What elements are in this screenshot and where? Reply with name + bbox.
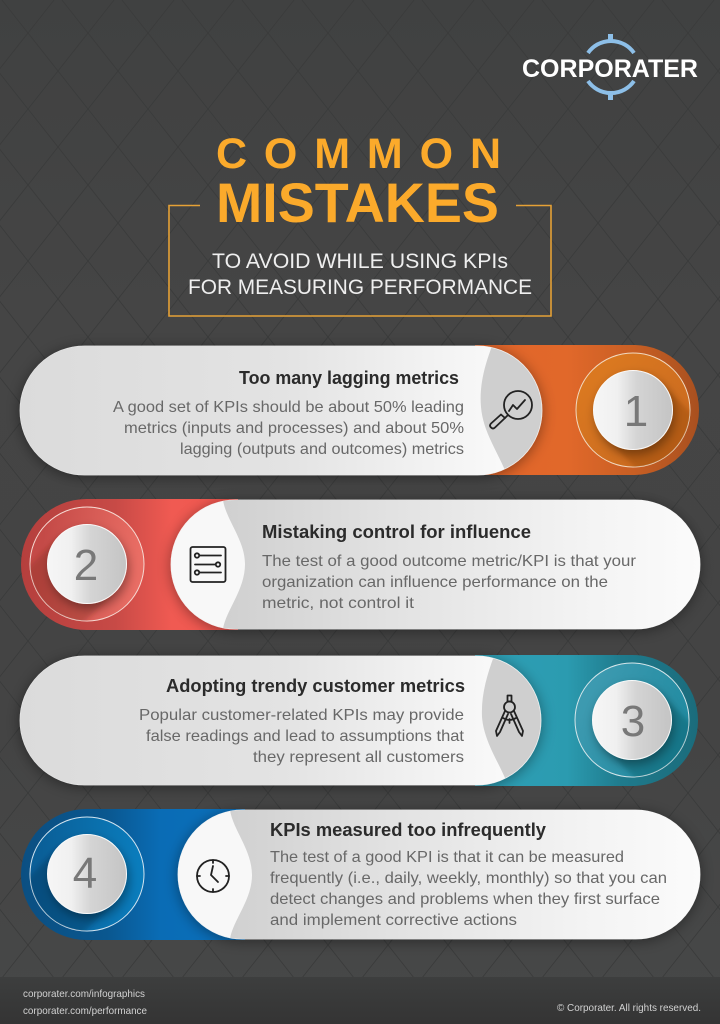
number badge 3: 3 [621,697,645,746]
heading: mistakes: MISTAKES [216,171,499,234]
white body [171,500,720,629]
logo: Corporater [522,34,698,100]
heading: common: COMMON [216,130,501,178]
icon: magnifier with trend line [490,391,532,428]
text 2: The test of a good outcome metric/KPI is that your [262,553,637,570]
white body [0,346,542,475]
white body [178,810,720,939]
coloured pill [475,655,698,786]
title frame [169,206,551,316]
footer [0,977,720,1024]
text 2: metric, not control it [262,595,415,612]
coloured pill [21,499,238,630]
panel: mistake 2 [21,498,704,635]
footer links [23,988,147,1017]
text 4: KPIs measured too infrequently [270,820,546,840]
number badge 4 [30,816,144,932]
text 2 [262,522,637,612]
number badge 2: 2 [74,541,98,590]
number badge 2 [30,506,144,622]
text 3: Popular customer-related KPIs may provide [139,707,464,724]
footer links: corporater.com/performance [23,1005,147,1017]
coloured pill [21,809,245,940]
text 1: metrics (inputs and processes) and about 50% [124,420,464,437]
text 1: Too many lagging metrics [239,368,459,388]
title block [169,130,551,316]
text 4: The test of a good KPI is that it can be measured [270,849,624,866]
text 1: A good set of KPIs should be about 50% leading [113,399,464,416]
text 4: detect changes and problems when they first surface [270,891,660,908]
subtitle: FOR MEASURING PERFORMANCE [188,276,532,299]
text 4: and implement corrective actions [270,912,517,929]
panel: mistake 3 [16,654,698,791]
icon: sliders list [190,547,226,582]
text 4: frequently (i.e., daily, weekly, monthly) so that you can [270,870,667,887]
white body [0,656,541,785]
text 2: Mistaking control for influence [262,522,531,542]
text 3: false readings and lead to assumptions that [146,728,465,745]
logo wordmark: CORPORATER [522,55,698,83]
text 2: organization can influence performance on the [262,574,608,591]
number badge 3 [574,662,690,778]
copyright: © Corporater. All rights reserved. [557,1002,701,1014]
text 1 [113,368,464,458]
icon: drafting compass [496,696,523,736]
panel: mistake 1 [16,344,699,481]
number badge 1: 1 [624,387,648,436]
number badge 1 [576,352,690,468]
panel: mistake 4 [21,808,704,945]
subtitle: TO AVOID WHILE USING KPIs [212,250,508,273]
text 3: they represent all customers [253,749,464,766]
number badge 4: 4 [73,849,97,898]
text 3: Adopting trendy customer metrics [166,676,465,696]
icon: clock [197,860,229,892]
icon: target ring [588,34,634,100]
text 1: lagging (outputs and outcomes) metrics [180,441,464,458]
text 4 [270,820,667,929]
subtitle [188,250,532,299]
footer links: corporater.com/infographics [23,988,145,1000]
text 3 [139,676,465,766]
coloured pill [475,345,699,475]
